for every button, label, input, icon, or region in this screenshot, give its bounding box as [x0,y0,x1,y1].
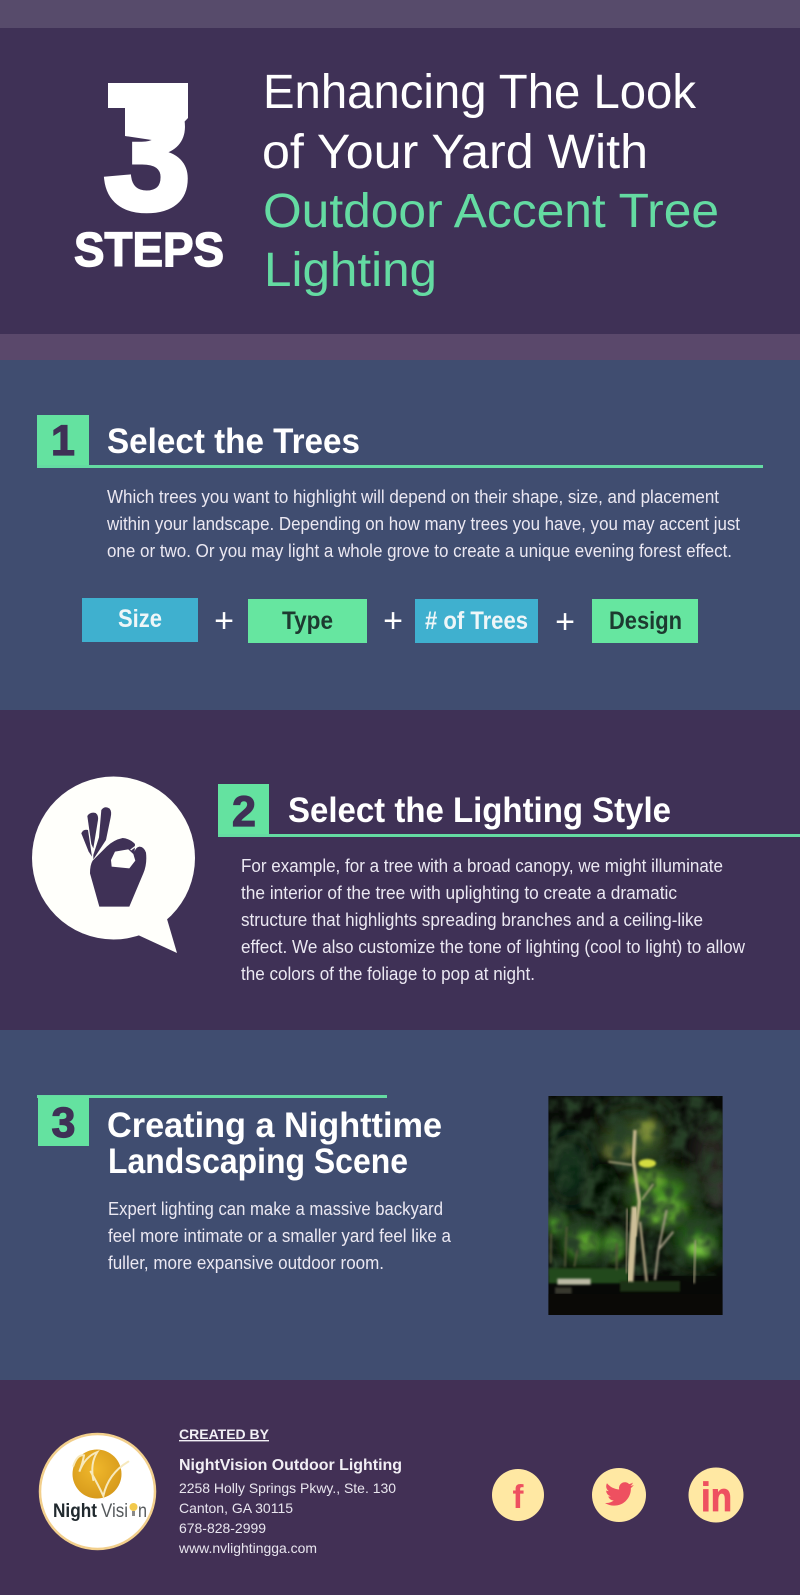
logo: NightVision: Night [53,1501,98,1522]
number of trees box [415,599,538,643]
size box [82,598,198,642]
step 1 body text: one or two. Or you may light a whole grove to create a unique evening forest effect. [107,541,732,561]
panel: step 1 select the trees [0,360,800,710]
step 3 number badge [38,1096,89,1147]
design box [592,599,698,643]
step 3 heading [107,1106,442,1181]
step 3 body text: feel more intimate or a smaller yard feel like a [108,1226,452,1246]
logo: NightVision: Visi [101,1501,128,1522]
step 2 number badge: 2 [232,788,256,836]
design box: Design [609,607,682,635]
title: Enhancing The Look [263,66,697,119]
step 1 number badge [37,415,89,468]
created by block: 678-828-2999 [179,1520,266,1536]
title: Outdoor Accent Tree [263,185,719,238]
photo: uplit tree at night [546,1096,728,1315]
icon: facebook: f [512,1478,524,1515]
step 3 number badge: 3 [52,1099,75,1147]
step 2 body text: structure that highlights spreading branches and a ceiling-like [241,910,703,930]
size box: Size [118,605,162,633]
step 2 body text: effect. We also customize the tone of lighting (cool to light) to allow [241,937,746,957]
created by block [178,1426,402,1556]
step 2 number badge [218,784,269,837]
logo: NightVision: n [138,1501,147,1522]
step 2 heading: Select the Lighting Style [288,791,671,830]
step 3 body text [108,1199,452,1273]
icon: twitter [592,1468,646,1522]
icon: facebook [492,1469,544,1521]
formula: size + type + number of trees + design [82,598,698,643]
icon: linkedin: in [701,1474,732,1520]
number of trees box: # of Trees [425,607,528,635]
type box: Type [282,607,333,635]
step 2 body text [241,856,746,984]
big number 3: 3 [103,64,191,243]
title: Lighting [264,244,437,297]
step 2 body text: For example, for a tree with a broad canopy, we might illuminate [241,856,723,876]
step 2 body text: the colors of the foliage to pop at night. [241,964,535,984]
title [262,66,719,297]
step 1 body text: within your landscape. Depending on how many trees you have, you may accent just [106,514,740,534]
STEPS label: STEPS [74,224,224,277]
step 1 body text: Which trees you want to highlight will depend on their shape, size, and placement [107,487,719,507]
created by block: CREATED BY [179,1426,270,1442]
step 1 number badge: 1 [51,417,75,465]
panel: step 3 creating a nighttime landscaping scene [0,1030,800,1380]
formula: size + type + number of trees + design: + [383,602,403,640]
step 3 body text: fuller, more expansive outdoor room. [108,1253,384,1273]
step 3 heading: Landscaping Scene [108,1142,408,1181]
panel: step 2 select the lighting style [0,710,800,1030]
created by block: www.nvlightingga.com [178,1540,317,1556]
step 1 heading: Select the Trees [107,422,360,461]
step 1 body text [106,487,740,561]
created by block: NightVision Outdoor Lighting [179,1457,402,1474]
type box [248,599,367,643]
icon: speech bubble with ok hand [32,776,195,953]
title: of Your Yard With [262,126,648,179]
created by block: Canton, GA 30115 [179,1500,293,1516]
created by block: 2258 Holly Springs Pkwy., Ste. 130 [179,1480,396,1496]
formula: size + type + number of trees + design: + [214,602,234,640]
header panel [0,0,800,360]
logo: NightVision [40,1434,155,1549]
step 2 body text: the interior of the tree with uplighting to create a dramatic [241,883,677,903]
step 3 body text: Expert lighting can make a massive backyard [108,1199,443,1219]
formula: size + type + number of trees + design: + [555,603,575,641]
panel: footer [0,1380,800,1595]
icon: linkedin [688,1468,744,1522]
step 3 heading: Creating a Nighttime [107,1106,442,1145]
